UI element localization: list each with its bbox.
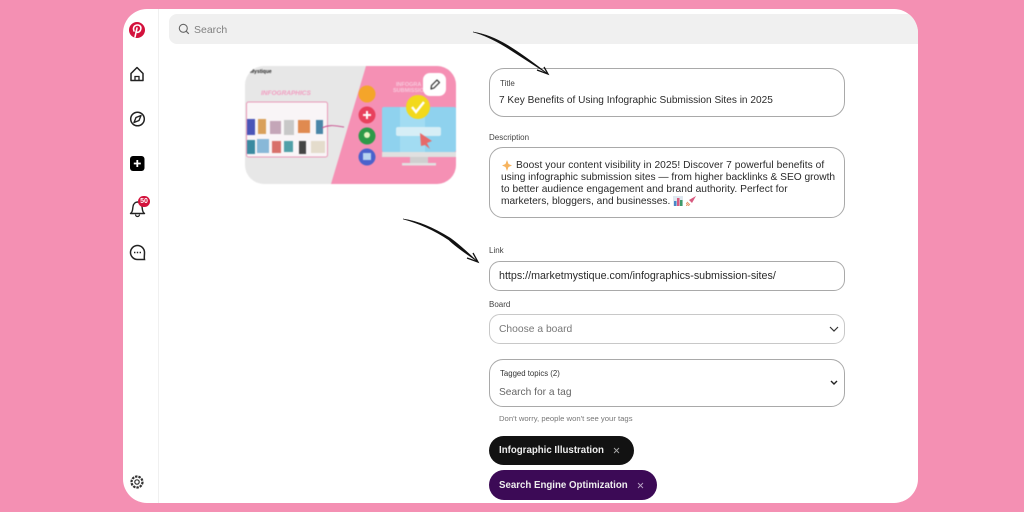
arrow: to link [402,218,480,264]
title field group [489,68,845,117]
description label: Description [489,133,529,142]
description text: Boost your content visibility in 2025! Discover 7 powerful benefits of [516,160,824,170]
title value: 7 Key Benefits of Using Infographic Submission Sites in 2025 [499,94,773,106]
icon: compass [131,112,144,126]
thumbnail background [245,66,456,184]
brand name: Mystique [250,69,272,75]
icon: create plus [130,156,144,171]
notification badge: 50 [140,198,148,205]
board placeholder: Choose a board [499,324,572,335]
pinterest screenshot [246,102,328,157]
icon: remove tag [638,482,644,488]
icon: search [178,24,190,34]
tag search placeholder: Search for a tag [499,386,572,398]
icon: tag chevron [830,380,838,385]
search placeholder: Search [194,24,227,36]
icon circles [358,86,376,166]
title label: Title [500,79,515,88]
tag label: Infographic Illustration [499,445,604,456]
board field [489,314,845,344]
icon: pinterest logo [129,22,145,38]
link value: https://marketmystique.com/infographics-submission-sites/ [499,270,776,282]
icon: remove tag [614,448,620,454]
icon: settings gear [132,476,142,488]
board label: Board [489,300,510,309]
icon: home [131,68,143,80]
search bar [169,14,918,44]
icon: messages [131,246,144,260]
description text [501,160,835,207]
tag: infographic illustration [489,436,634,465]
thumbnail heading right: INFOGRA [396,82,421,88]
connector arrow [322,126,344,128]
tagged topics field [489,359,845,407]
pin thumbnail [245,65,457,185]
monitor illustration [382,107,456,166]
description text: using infographic submission sites — from higher backlinks & SEO growth [501,172,835,183]
link field [489,261,845,291]
link label: Link [489,246,504,255]
edit button [423,73,446,96]
description text: marketers, bloggers, and businesses. [501,196,670,207]
tag label: Search Engine Optimization [499,480,628,491]
icon: board chevron [830,326,838,332]
helper text: Don't worry, people won't see your tags [499,414,633,422]
description field [489,147,845,218]
tagged topics label: Tagged topics (2) [500,369,560,378]
title input [489,68,845,117]
pin thumbnail: SUBMISSION S [393,88,433,94]
thumbnail heading: INFOGRAPHICS [261,90,312,97]
arrow: to title [472,32,550,76]
sidebar icons [129,22,146,489]
check badge [406,95,430,119]
description text: to better audience engagement and brand authority. Perfect for [501,184,788,195]
tag: search engine optimization [489,470,657,500]
icon: notification bell [130,202,144,216]
sidebar divider [158,9,159,503]
white app card [123,9,918,503]
notification badge [138,196,150,207]
